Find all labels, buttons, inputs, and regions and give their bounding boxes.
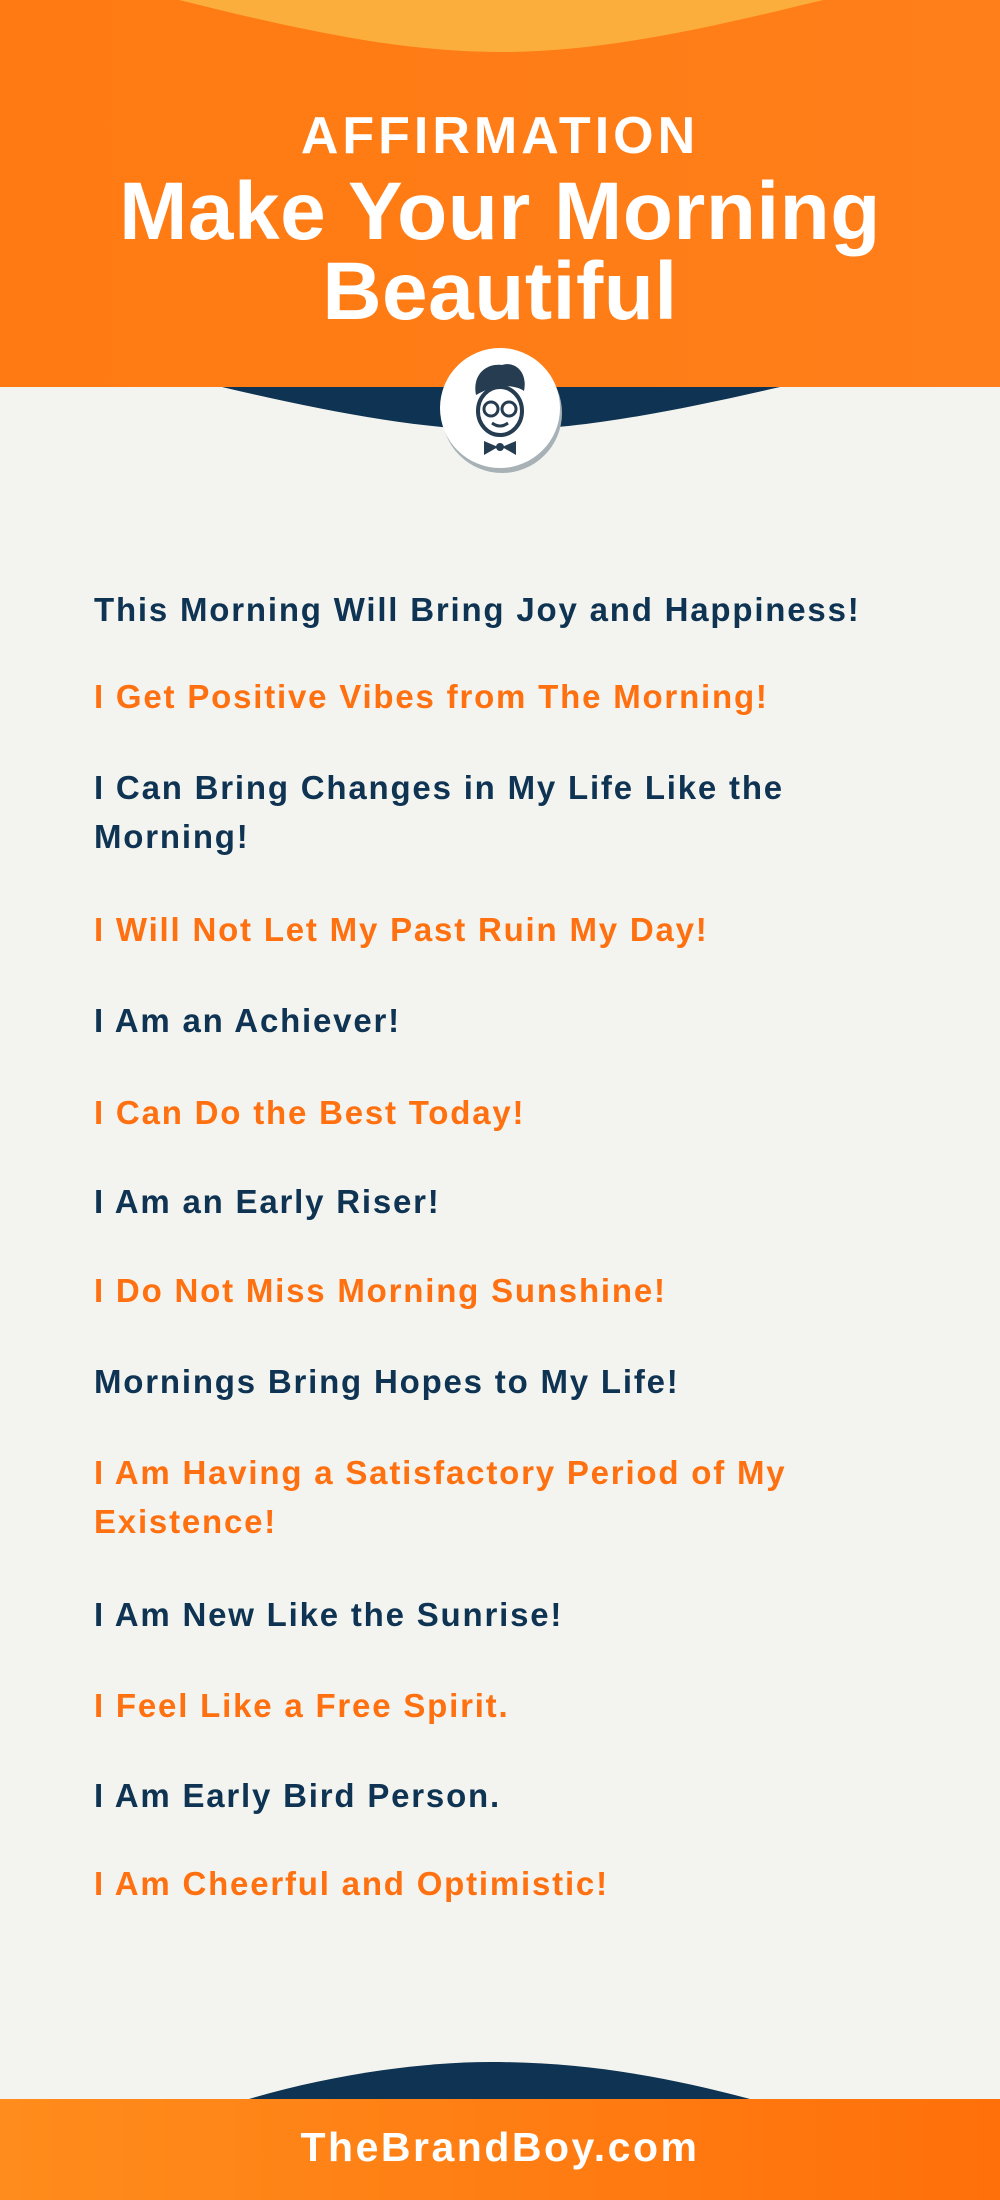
item 7: I Am an Early Riser!	[94, 1183, 441, 1220]
title	[119, 166, 881, 337]
item 14: I Am Cheerful and Optimistic!	[94, 1865, 609, 1902]
item 6: I Can Do the Best Today!	[94, 1094, 525, 1131]
title: Make Your Morning	[119, 166, 881, 257]
footer brand text: TheBrandBoy.com	[301, 2124, 699, 2170]
item 4: I Will Not Let My Past Ruin My Day!	[94, 911, 709, 948]
item 2: I Get Positive Vibes from The Morning!	[94, 678, 769, 715]
affirmation list	[94, 591, 861, 1902]
item 3: I Can Bring Changes in My Life Like the	[94, 769, 784, 806]
item 3	[94, 769, 784, 855]
item 1: This Morning Will Bring Joy and Happiness!	[94, 591, 861, 628]
kicker: AFFIRMATION: AFFIRMATION	[301, 107, 699, 165]
title: Beautiful	[322, 246, 678, 337]
item 9: Mornings Bring Hopes to My Life!	[94, 1363, 680, 1400]
item 10: I Am Having a Satisfactory Period of My	[94, 1454, 786, 1491]
item 8: I Do Not Miss Morning Sunshine!	[94, 1272, 667, 1309]
item 11: I Am New Like the Sunrise!	[94, 1596, 563, 1633]
item 12: I Feel Like a Free Spirit.	[94, 1687, 509, 1724]
item 5: I Am an Achiever!	[94, 1002, 401, 1039]
item 10	[94, 1454, 786, 1540]
icon: brand boy logo	[440, 348, 562, 473]
header background	[0, 0, 1000, 428]
item 3: Morning!	[94, 818, 250, 855]
item 13: I Am Early Bird Person.	[94, 1777, 501, 1814]
footer background	[0, 2062, 1000, 2200]
item 10: Existence!	[94, 1503, 277, 1540]
